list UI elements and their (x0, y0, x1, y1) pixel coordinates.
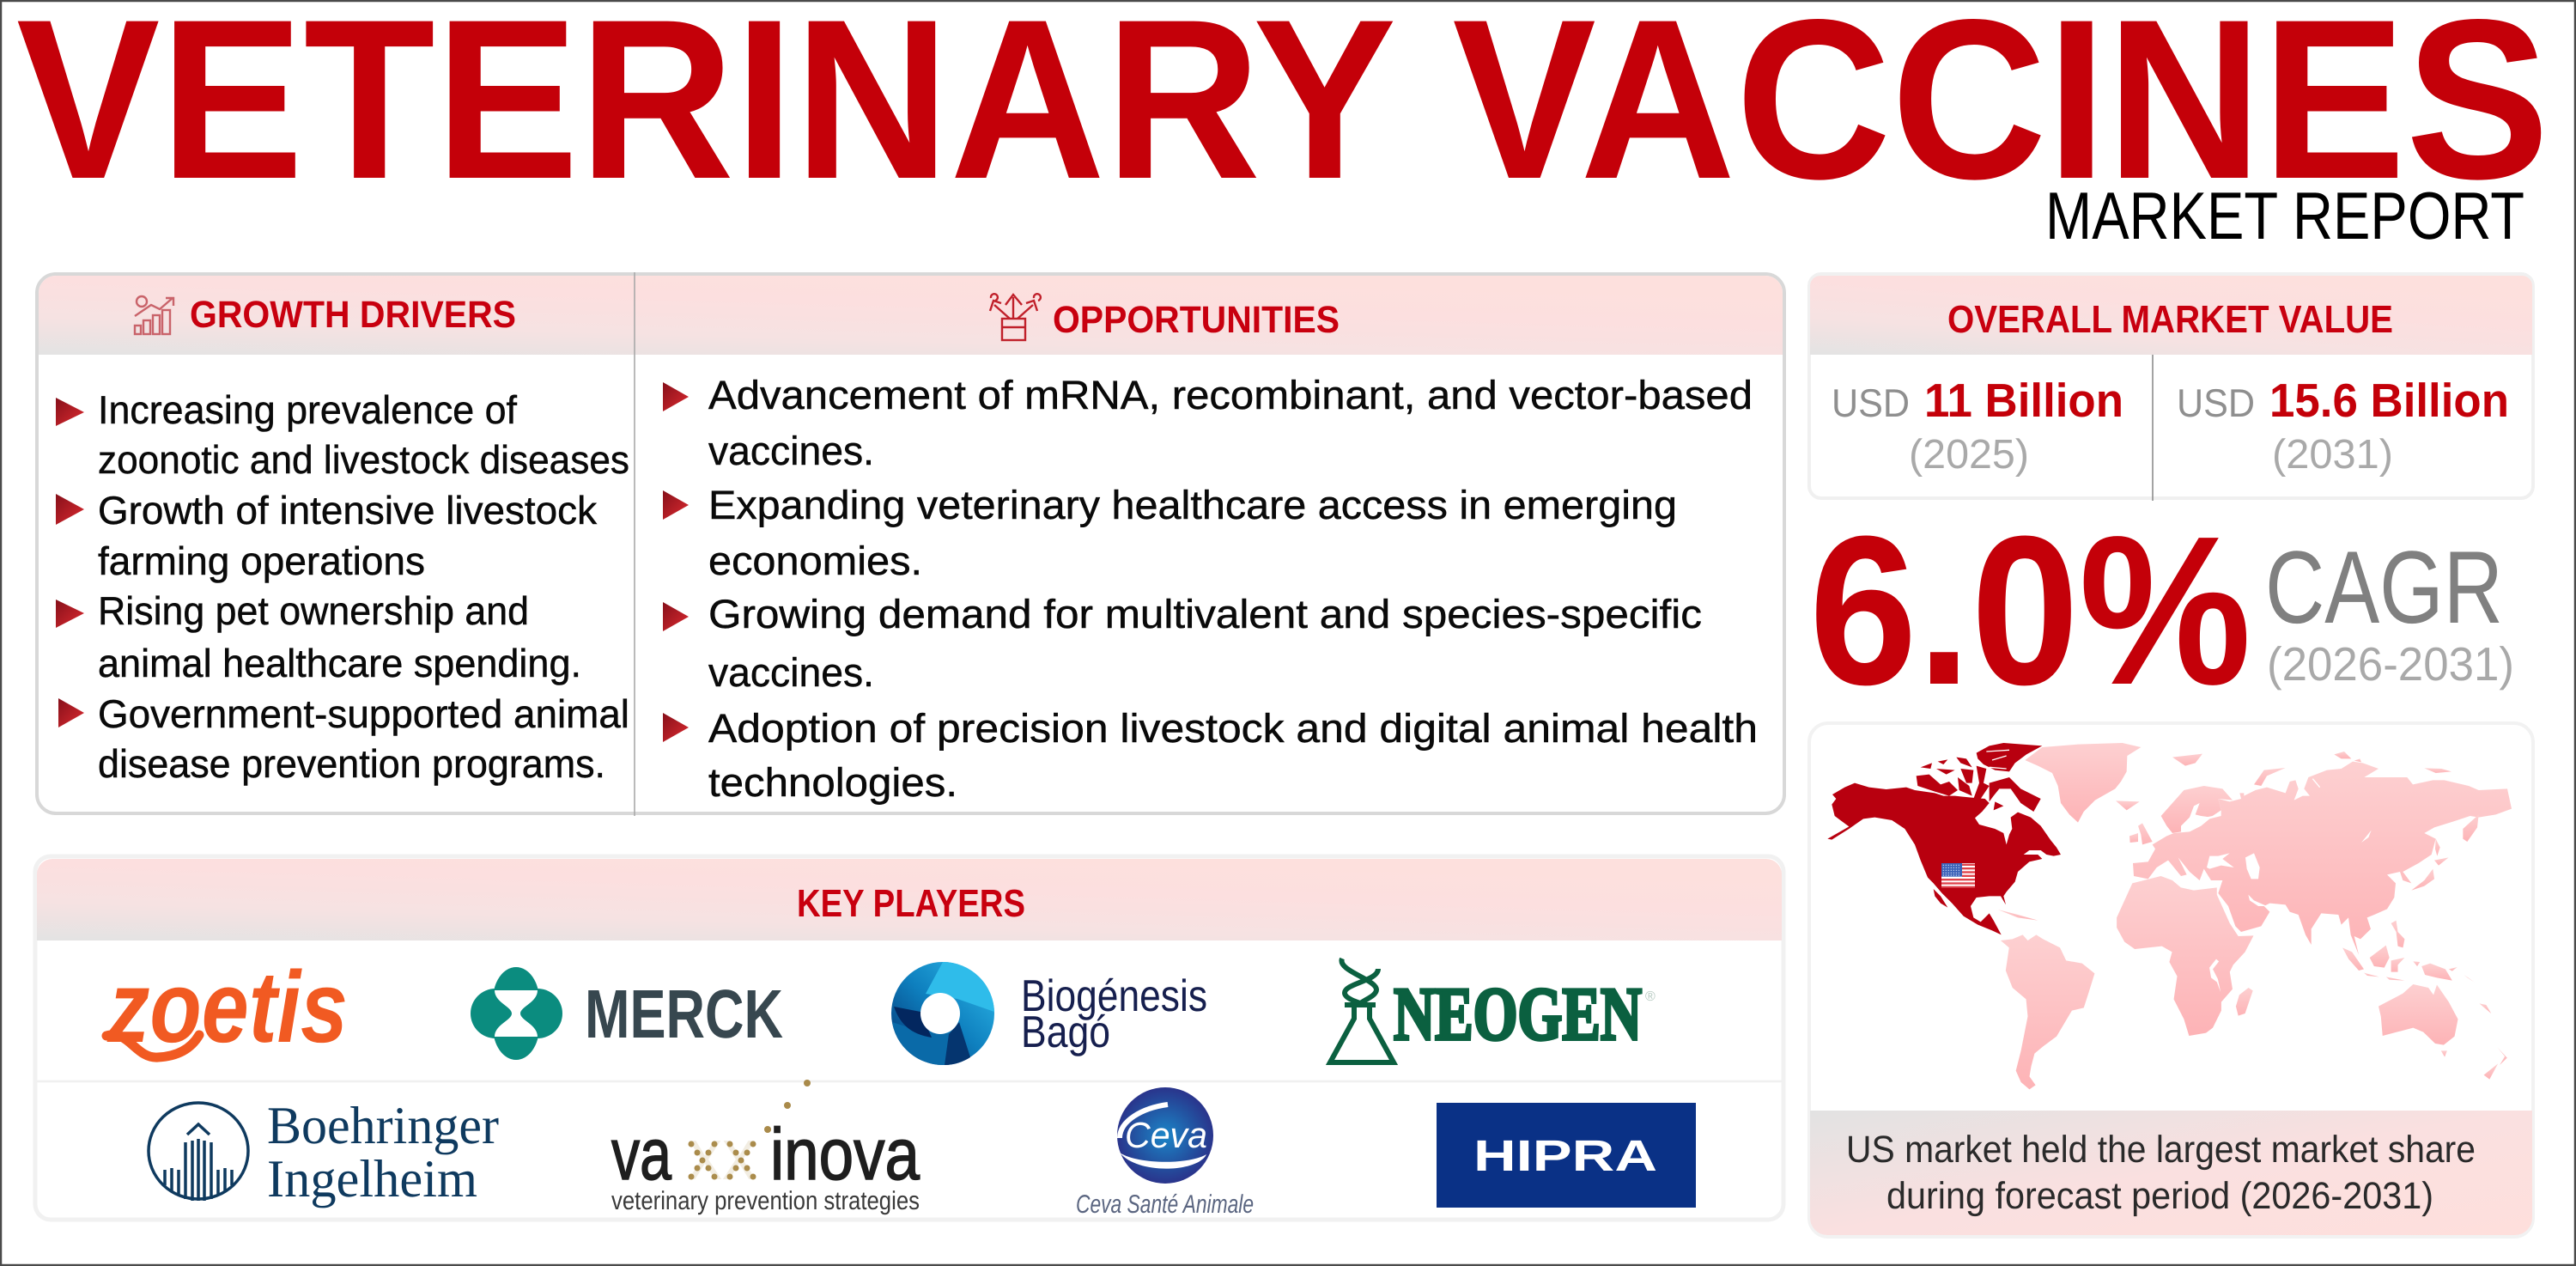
logo: Merck (471, 967, 783, 1060)
value 2031: 15.6 Billion (2269, 374, 2509, 427)
logo: Ceva (1076, 1087, 1254, 1219)
logo: Hipra: HIPRA (1473, 1131, 1657, 1180)
heading: key players: KEY PLAYERS (797, 881, 1025, 925)
list: opportunities: Adoption of precision livestock and digital animal health (708, 705, 1758, 751)
list: growth drivers (56, 387, 629, 786)
caption text: during forecast period (2026-2031) (1886, 1175, 2433, 1217)
list: opportunities: Advancement of mRNA, recombinant, and vector-based (708, 372, 1753, 417)
list: growth drivers: animal healthcare spending. (98, 641, 581, 685)
logo: Ceva: Ceva (1125, 1115, 1207, 1155)
value 2025: (2025) (1909, 432, 2029, 478)
icon: US flag (1941, 863, 1975, 887)
logo: Ceva: Ceva Santé Animale (1076, 1190, 1254, 1219)
logo: Hipra (1437, 1103, 1696, 1208)
CAGR callout (1809, 492, 2514, 729)
heading: growth drivers: GROWTH DRIVERS (190, 294, 516, 336)
caption text: US market held the largest market share (1846, 1129, 2476, 1171)
list: opportunities: vaccines. (708, 428, 874, 473)
logo: Vaxxinova: veterinary prevention strategies (611, 1187, 920, 1215)
world map (1827, 743, 2512, 1089)
caption band (1810, 1111, 2532, 1235)
logo: Merck: MERCK (585, 976, 783, 1052)
value 2025 (1832, 374, 2123, 478)
logo: Neogen: ® (1645, 989, 1656, 1004)
list: opportunities: technologies. (708, 759, 957, 805)
panel: growth drivers and opportunities (37, 272, 1784, 816)
map: Eurasia (2116, 752, 2512, 955)
heading: overall market value: OVERALL MARKET VALUE (1947, 297, 2393, 341)
logo: Biogenesis Bago (891, 962, 1207, 1065)
list: opportunities: vaccines. (708, 649, 874, 695)
list: growth drivers: Rising pet ownership and (98, 588, 529, 633)
logo: Biogenesis Bago: Bagó (1021, 1007, 1110, 1057)
logo: Boehringer Ingelheim (149, 1097, 499, 1208)
logo: Boehringer Ingelheim: Ingelheim (267, 1150, 477, 1208)
list: growth drivers: zoonotic and livestock diseases (98, 437, 629, 482)
CAGR callout: 6.0% (1809, 492, 2251, 729)
list: growth drivers: disease prevention programs. (98, 741, 605, 786)
list: growth drivers: Growth of intensive livestock (98, 488, 598, 533)
icon: growth chart (135, 296, 173, 334)
list: growth drivers: farming operations (98, 539, 425, 583)
logo: Vaxxinova (611, 1080, 920, 1215)
list: opportunities: Growing demand for multivalent and species-specific (708, 591, 1702, 636)
logo: Neogen (1330, 959, 1656, 1062)
list: opportunities: Expanding veterinary healthcare access in emerging (708, 482, 1677, 527)
list: growth drivers: Government-supported animal (98, 691, 629, 736)
value 2031: (2031) (2272, 432, 2393, 478)
CAGR callout: (2026-2031) (2267, 637, 2514, 691)
logo: Vaxxinova: xx (688, 1114, 756, 1196)
panel: key players (35, 856, 1783, 1220)
logo: Boehringer Ingelheim: Boehringer (267, 1097, 499, 1155)
logo: Neogen: NEOGEN (1394, 973, 1642, 1056)
map: southern continents (2001, 876, 2507, 1089)
panel: overall market value (1809, 274, 2533, 501)
logo: Biogenesis Bago: Biogénesis (1021, 971, 1207, 1021)
list: opportunities (663, 372, 1758, 805)
icon: opportunities plant (990, 294, 1041, 340)
caption text (1846, 1129, 2476, 1217)
value 2031 (2177, 374, 2509, 478)
highlighted region: North America (1827, 743, 2141, 934)
logo: Vaxxinova: va (611, 1114, 672, 1196)
logo: Vaxxinova: inova (770, 1114, 920, 1196)
panel: regional map (1809, 723, 2533, 1237)
value 2031: USD (2177, 380, 2255, 425)
CAGR callout: CAGR (2265, 530, 2503, 645)
value 2025: USD (1832, 380, 1910, 425)
value 2025: 11 Billion (1924, 374, 2123, 427)
list: opportunities: economies. (708, 538, 922, 583)
heading: opportunities: OPPORTUNITIES (1053, 299, 1340, 341)
logo: Zoetis: zoetis (106, 951, 348, 1064)
list: growth drivers: Increasing prevalence of (98, 387, 517, 432)
